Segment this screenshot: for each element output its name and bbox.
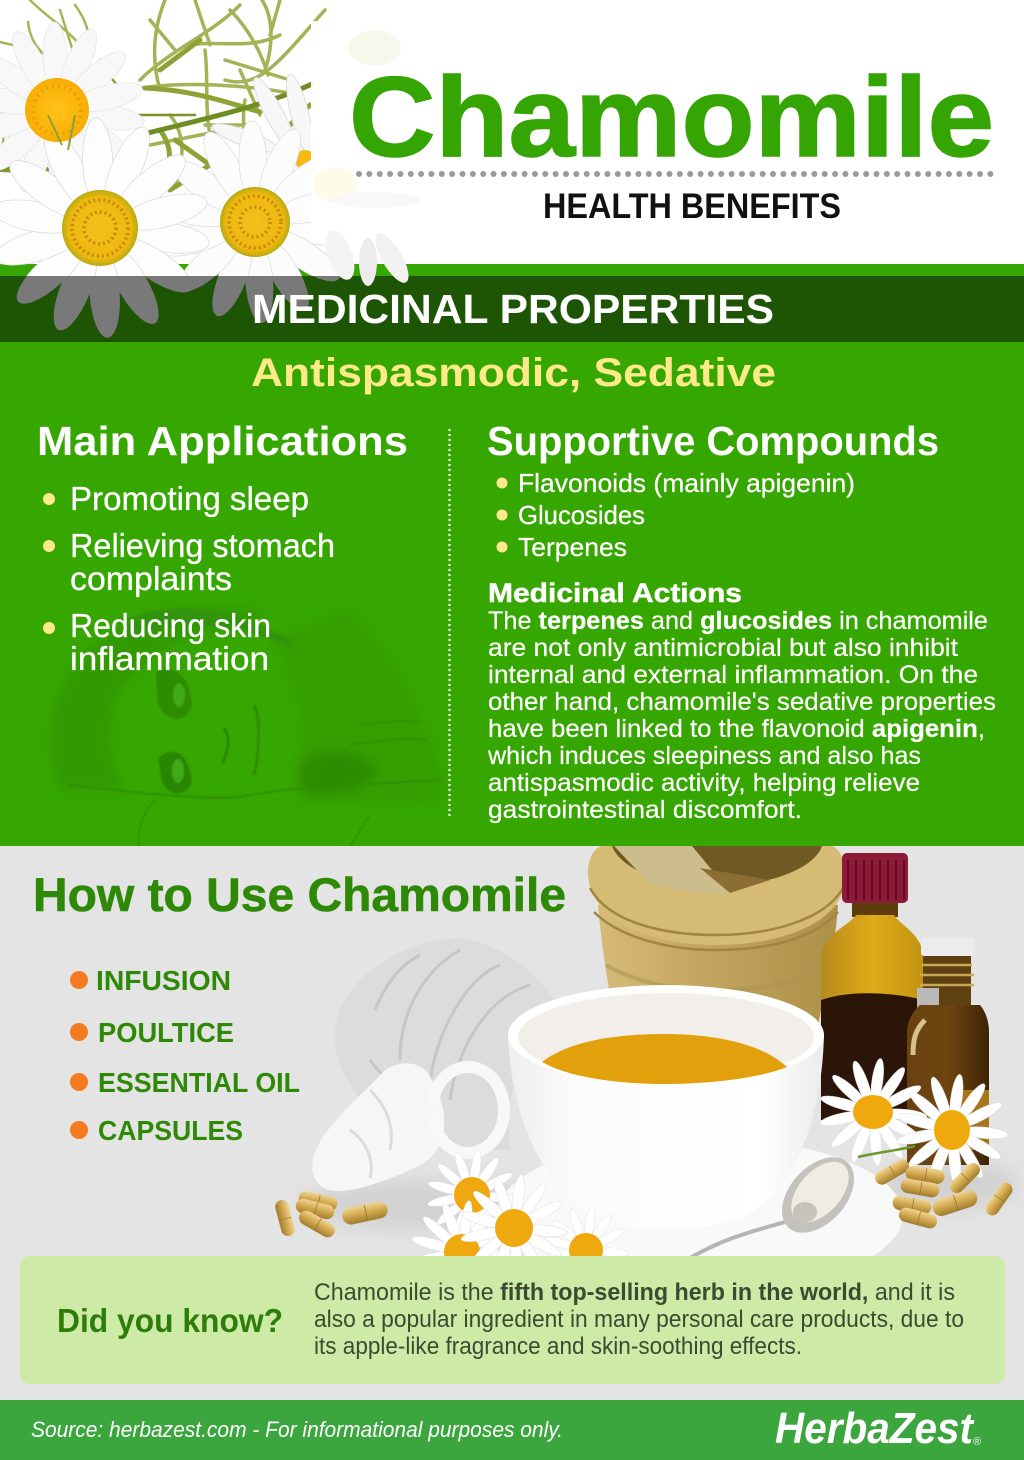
supportive compounds column: [487, 418, 996, 824]
bullet: promoting sleep: Promoting sleep: [70, 480, 309, 517]
item: essential oil: ESSENTIAL OIL: [98, 1067, 300, 1098]
bullet: relieving stomach complaints: [43, 527, 335, 597]
heading: main applications: Main Applications: [37, 418, 408, 464]
illustration: remedies still life: [275, 846, 1016, 1256]
icon: daisies in front of cup: [412, 1150, 630, 1256]
header background: [0, 0, 1024, 264]
medicinal actions paragraph: internal and external inflammation. On the: [488, 661, 978, 689]
medicinal actions paragraph: which induces sleepiness and also has: [487, 742, 921, 770]
bullet: glucosides: Glucosides: [518, 500, 645, 530]
icon: cloth poultice bag: [312, 948, 530, 1191]
logo: herbazest: ®: [973, 1436, 981, 1448]
callout text: also a popular ingredient in many personal care products, due to: [314, 1306, 964, 1333]
icon: saucer: [498, 1148, 902, 1256]
flower: faded petals below panel: [320, 226, 415, 287]
medicinal actions paragraph: antispasmodic activity, helping relieve: [488, 769, 920, 797]
icon: capsules right: [873, 1157, 1015, 1230]
flower: right yellow daisy: [168, 120, 340, 323]
icon: daisies by bottles: [819, 1058, 1008, 1186]
callout text: Chamomile is the fifth top-selling herb in the world, and it is: [314, 1279, 955, 1306]
bullet: reducing skin inflammation: [43, 607, 271, 677]
bullet: reducing skin inflammation: inflammation: [70, 640, 269, 677]
icon: silver spoon: [690, 1157, 854, 1256]
item: capsules: CAPSULES: [98, 1115, 243, 1146]
source note: Source: herbazest.com - For informational purposes only.: [31, 1417, 563, 1442]
flower: back orange daisy centre: [25, 78, 89, 150]
callout: did you know: [20, 1256, 1005, 1384]
subtitle: HEALTH BENEFITS: [543, 187, 841, 226]
bullet: relieving stomach complaints: Relieving stomach: [70, 527, 335, 564]
heading: supportive compounds: Supportive Compounds: [487, 418, 939, 464]
heading: antispasmodic, sedative: Antispasmodic, Sedative: [251, 351, 776, 395]
bullet: reducing skin inflammation: Reducing skin: [70, 607, 271, 644]
medicinal actions paragraph: The terpenes and glucosides in chamomile: [488, 607, 988, 635]
panel: how to use background: [0, 846, 1024, 1400]
dotted column divider: [448, 430, 451, 818]
usage list: [70, 965, 300, 1146]
footer: [0, 1400, 1024, 1460]
icon: capsules left: [274, 1190, 389, 1240]
heading: how to use chamomile: How to Use Chamomile: [33, 868, 566, 921]
title: Chamomile: [349, 54, 994, 180]
flower: back orange daisy petals: [0, 22, 146, 199]
medicinal actions paragraph: gastrointestinal discomfort.: [488, 796, 802, 824]
subheading: medicinal actions: Medicinal Actions: [488, 578, 742, 608]
item: poultice: POULTICE: [98, 1017, 234, 1048]
logo: herbazest: HerbaZest: [775, 1404, 975, 1453]
translucent white title panel with faded flower: [311, 21, 461, 243]
flower: large left yellow daisy: [0, 118, 211, 339]
dark heading band: [0, 276, 1024, 342]
item: infusion: INFUSION: [96, 965, 231, 996]
flower: faded daisy behind panel: [209, 72, 319, 170]
main applications column: [37, 418, 408, 677]
medicinal actions paragraph: other hand, chamomile's sedative properties: [488, 688, 996, 716]
medicinal actions paragraph: have been linked to the flavonoid apigenin,: [488, 715, 985, 743]
bullet: relieving stomach complaints: complaints: [70, 560, 232, 597]
bullet: flavonoids: Flavonoids (mainly apigenin): [518, 468, 855, 498]
icon: white teacup: [434, 985, 824, 1165]
callout heading: Did you know?: [57, 1302, 283, 1339]
medicinal actions paragraph: [487, 607, 996, 824]
chamomile stems illustration: [0, 0, 325, 190]
callout text: its apple-like fragrance and skin-soothing effects.: [314, 1333, 802, 1360]
medicinal actions paragraph: are not only antimicrobial but also inhibit: [488, 634, 958, 662]
icon: small amber bottle: [907, 938, 989, 1165]
panel: medicinal properties background: [0, 264, 1024, 846]
soft table shadows: [300, 1160, 1020, 1230]
dotted title divider: [359, 171, 992, 177]
callout text: [314, 1279, 964, 1360]
icon: dark oil bottle: [821, 853, 924, 1120]
bullet: terpenes: Terpenes: [518, 532, 627, 562]
icon: stone mortar and pestle: [588, 846, 842, 1022]
heading: medicinal properties: MEDICINAL PROPERTIES: [252, 286, 774, 332]
sleeping woman background image: [50, 606, 446, 846]
